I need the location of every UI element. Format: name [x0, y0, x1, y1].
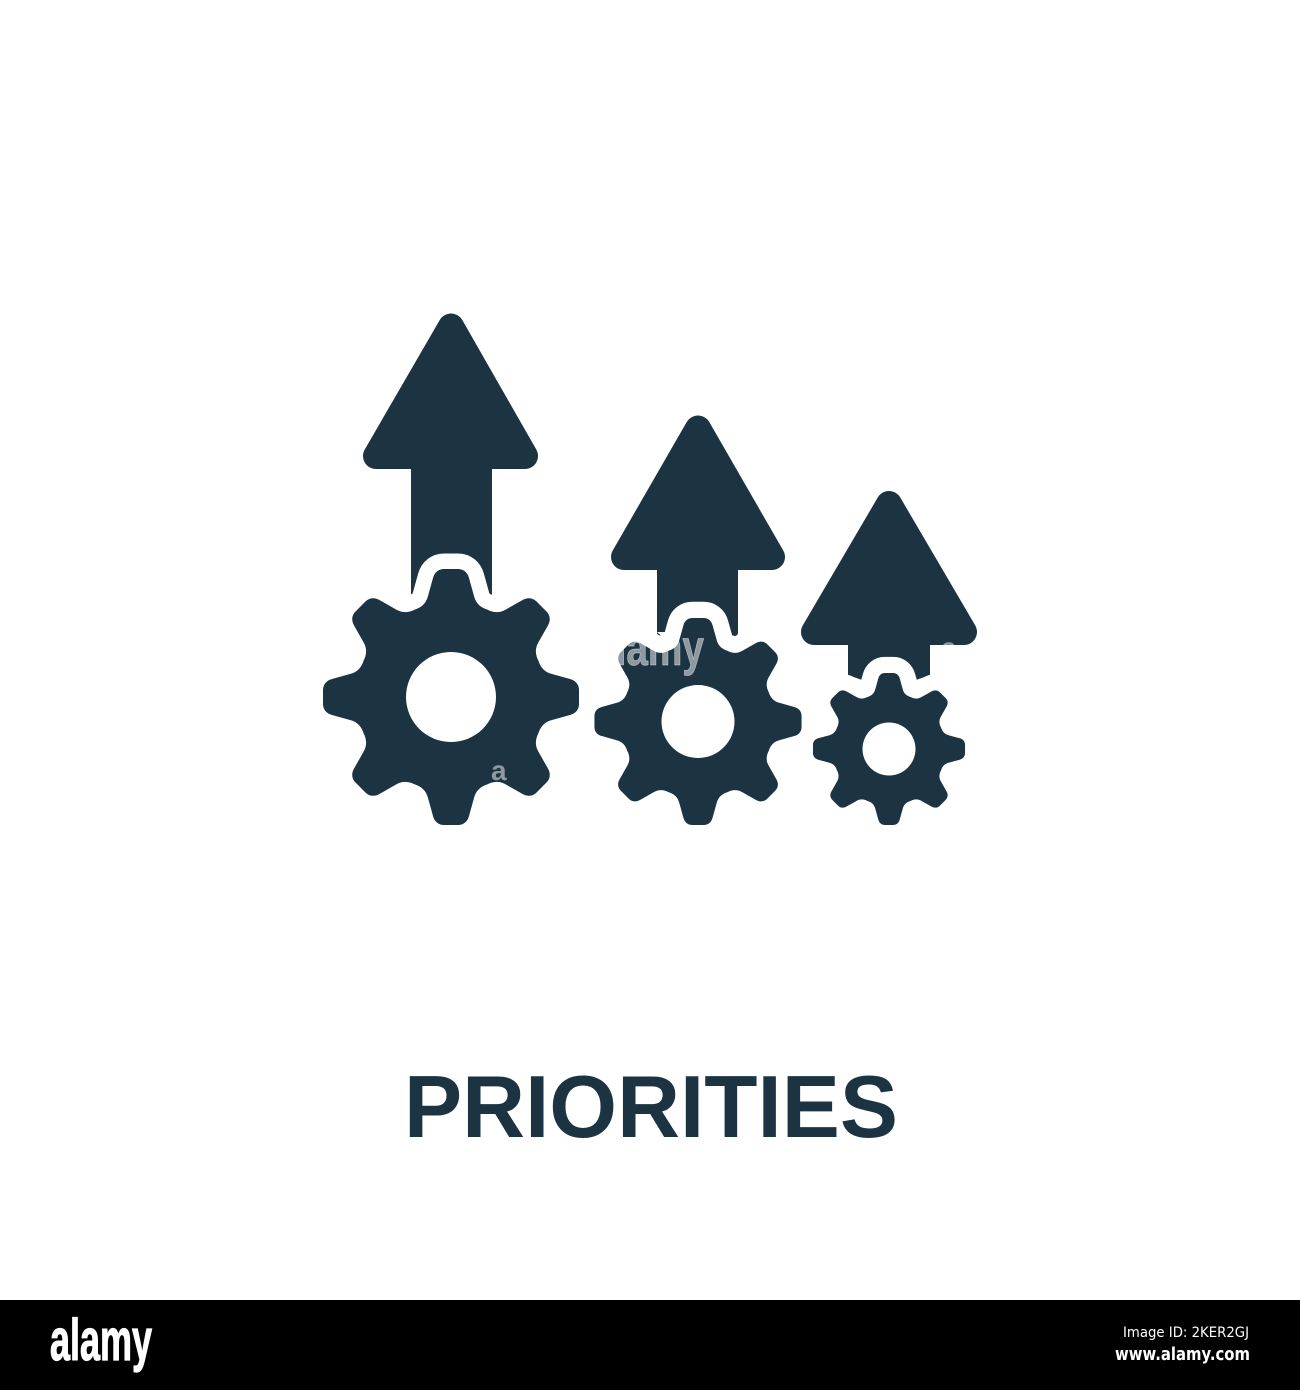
icon: small arrow	[814, 504, 964, 680]
footer url: www.alamy.com	[1115, 1344, 1250, 1365]
gear clearance outlines	[323, 569, 965, 825]
icon: large gear	[323, 569, 579, 825]
footer image id: Image ID: 2KER2GJ	[1123, 1325, 1249, 1341]
watermark fragment on small arrow: a	[941, 632, 957, 663]
icon: arrows rising from gears	[323, 326, 965, 825]
title: PRIORITIES	[404, 1057, 898, 1156]
icon: small gear	[813, 673, 965, 825]
footer bar	[0, 1300, 1300, 1390]
watermark: alamy over medium gear: alamy	[594, 620, 704, 676]
icon: large arrow	[376, 326, 525, 596]
footer logo: alamy	[50, 1308, 152, 1373]
watermark fragment on large gear: a	[491, 755, 507, 786]
icon: medium gear	[594, 618, 802, 825]
icon: medium arrow	[624, 428, 772, 636]
